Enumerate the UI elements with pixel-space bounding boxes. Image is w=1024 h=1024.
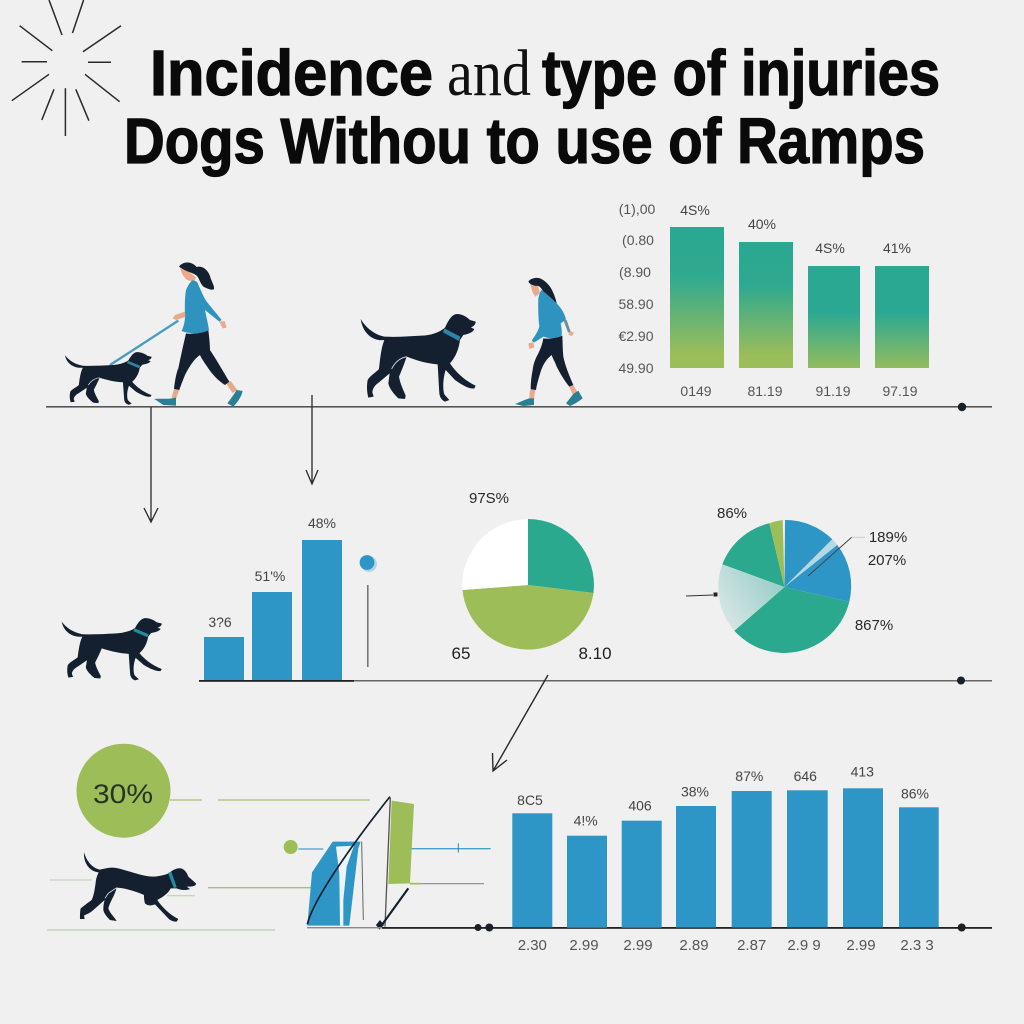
bar chart: top gradient bars: (0.80 xyxy=(622,232,654,248)
bar chart: top gradient bars: €2.90 xyxy=(618,328,654,344)
icon: starburst xyxy=(12,0,121,136)
bar chart: middle blue bars: 48% xyxy=(308,515,336,531)
pie chart: three segments xyxy=(452,490,612,663)
bar chart: middle blue bars: 3?6 xyxy=(208,614,232,630)
bar chart: top gradient bars: 4S% xyxy=(815,240,845,256)
pie chart: multi-segment xyxy=(686,505,907,653)
arrow: down left xyxy=(144,407,158,522)
ground line: top row xyxy=(46,403,992,411)
title xyxy=(124,37,940,177)
arrow: diagonal to bottom chart xyxy=(492,675,548,771)
bar chart: middle blue bars xyxy=(204,515,342,680)
icon: black dog middle row xyxy=(62,618,162,680)
pie chart: multi-segment: 189% xyxy=(869,529,907,546)
pie chart: multi-segment: 867% xyxy=(855,617,893,634)
icon: black dog bottom row xyxy=(80,852,196,922)
pie chart: three segments: 8.10 xyxy=(578,644,612,663)
bar chart: top gradient bars: 0149 xyxy=(680,383,712,399)
pie chart: multi-segment: 207% xyxy=(868,552,906,569)
title: Incidence xyxy=(150,37,433,109)
arrow: down center xyxy=(306,395,318,484)
ground line: middle row xyxy=(199,676,992,684)
bar chart: top gradient bars: 49.90 xyxy=(618,360,654,376)
bar chart: bottom blue bars: 2.30 xyxy=(518,937,547,954)
bar chart: bottom blue bars xyxy=(512,764,939,954)
pie chart: multi-segment: 86% xyxy=(717,505,747,522)
bar chart: bottom blue bars: 2.3 3 xyxy=(900,937,934,954)
bar chart: middle blue bars: 51'% xyxy=(255,568,285,584)
icon: legend dot with vertical line xyxy=(360,555,377,667)
bar chart: bottom blue bars: 2.9 9 xyxy=(787,937,821,954)
bar chart: bottom blue bars: 4!% xyxy=(574,813,598,829)
bar chart: bottom blue bars: 2.87 xyxy=(737,937,766,954)
icon: black dog on leash xyxy=(65,352,152,405)
icon: ramp diagram xyxy=(284,797,491,930)
bar chart: bottom blue bars: 86% xyxy=(901,786,929,802)
connector lines: green guides xyxy=(47,800,370,930)
bar chart: bottom blue bars: 2.99 xyxy=(623,937,653,954)
callout: 30 percent: 30% xyxy=(93,779,153,809)
ground line: bottom row xyxy=(307,924,992,932)
bar chart: top gradient bars: 97.19 xyxy=(882,383,918,399)
bar chart: top gradient bars: (1),00 xyxy=(619,201,655,217)
icon: woman walking xyxy=(515,278,583,406)
bar chart: bottom blue bars: 413 xyxy=(851,764,874,780)
bar chart: bottom blue bars: 2.89 xyxy=(679,937,709,954)
bar chart: bottom blue bars: 38% xyxy=(681,784,709,800)
bar chart: top gradient bars: 58.90 xyxy=(618,296,654,312)
bar chart: top gradient bars: 41% xyxy=(883,240,911,256)
bar chart: bottom blue bars: 87% xyxy=(735,768,763,784)
title: and xyxy=(447,37,531,110)
callout: 30 percent xyxy=(76,744,170,838)
bar chart: top gradient bars xyxy=(618,201,929,399)
bar chart: bottom blue bars: 8C5 xyxy=(517,792,543,808)
bar chart: bottom blue bars: 406 xyxy=(628,798,652,814)
title: Dogs Withou to use of Ramps xyxy=(124,105,925,177)
icon: woman walking with leash xyxy=(110,262,243,407)
bar chart: top gradient bars: 40% xyxy=(748,216,776,232)
bar chart: bottom blue bars: 2.99 xyxy=(569,937,599,954)
pie chart: three segments: 65 xyxy=(452,644,470,663)
bar chart: bottom blue bars: 2.99 xyxy=(846,937,876,954)
icon: black dog standing xyxy=(361,314,476,402)
pie chart: three segments: 97S% xyxy=(469,490,509,507)
bar chart: bottom blue bars: 646 xyxy=(794,768,817,784)
bar chart: top gradient bars: 4S% xyxy=(680,202,710,218)
bar chart: top gradient bars: 91.19 xyxy=(815,383,851,399)
title: type of injuries xyxy=(542,37,940,109)
bar chart: top gradient bars: 81.19 xyxy=(747,383,783,399)
bar chart: top gradient bars: (8.90 xyxy=(619,264,651,280)
